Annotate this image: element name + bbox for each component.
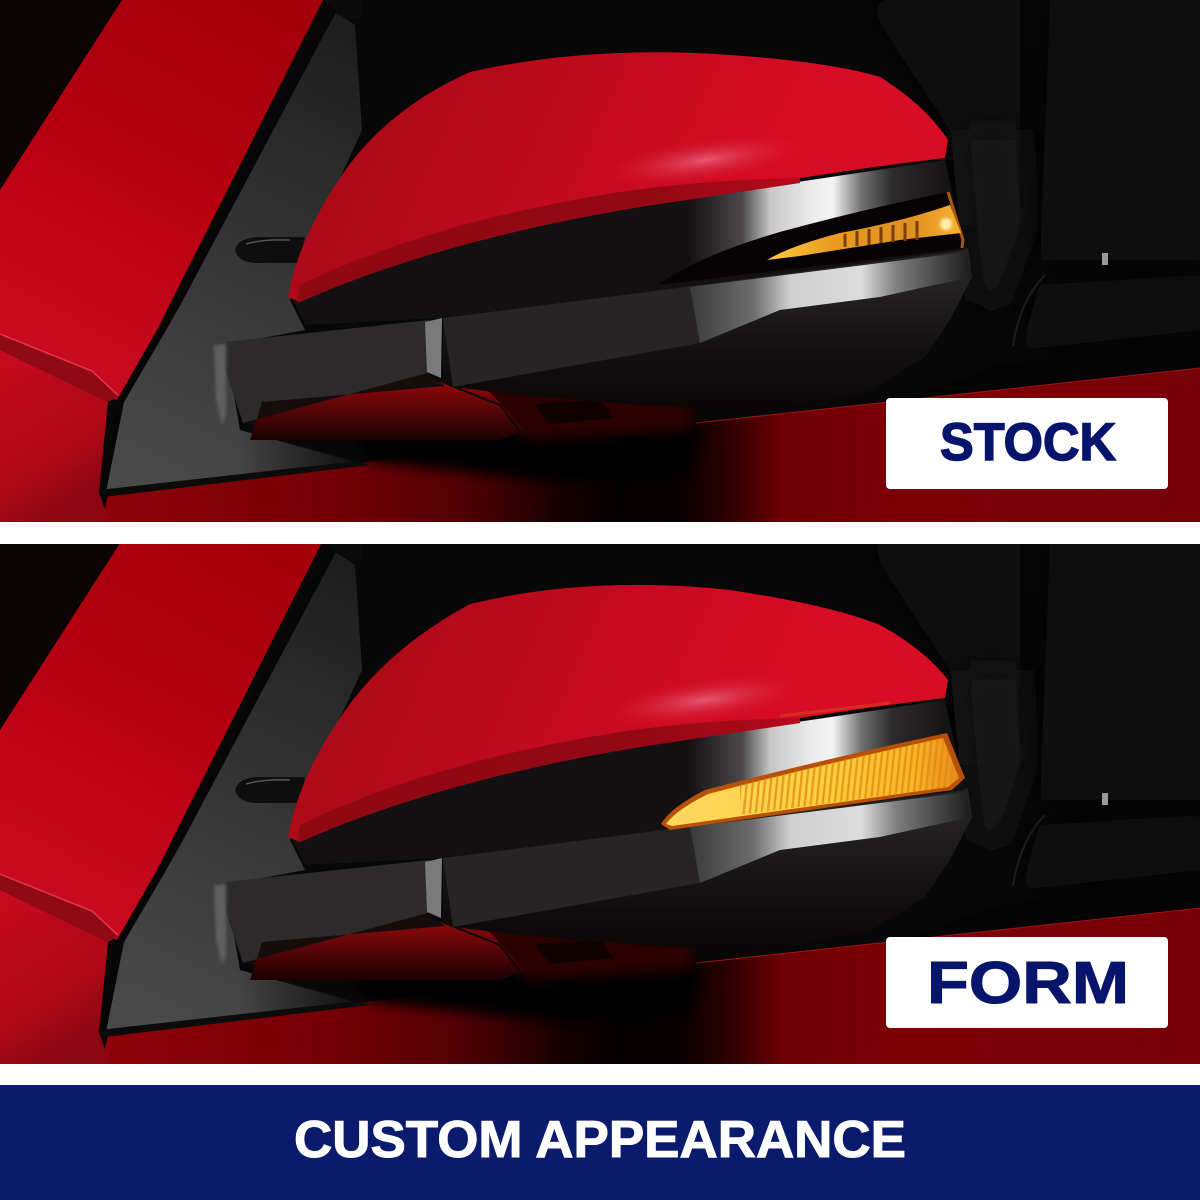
red mirror cap, form panel [288,585,948,843]
label: STOCK [886,398,1168,489]
label: FORM logo [886,937,1168,1028]
panel: form mirror photo [0,540,1200,1070]
panel: stock mirror photo [0,0,1200,530]
label: STOCK: STOCK [940,413,1116,472]
red mirror cap, stock panel [288,52,948,303]
banner: custom appearance [0,1085,1200,1200]
stock lamp hot spot [940,218,952,230]
label: FORM logo: FORM [927,950,1129,1016]
stock lamp ribs [845,221,917,247]
stock lamp amber rim [948,192,963,248]
banner: custom appearance: CUSTOM APPEARANCE [294,1111,906,1169]
stock lamp housing [658,192,965,285]
stock amber lamp [767,205,961,260]
form amber lamp [661,733,965,830]
